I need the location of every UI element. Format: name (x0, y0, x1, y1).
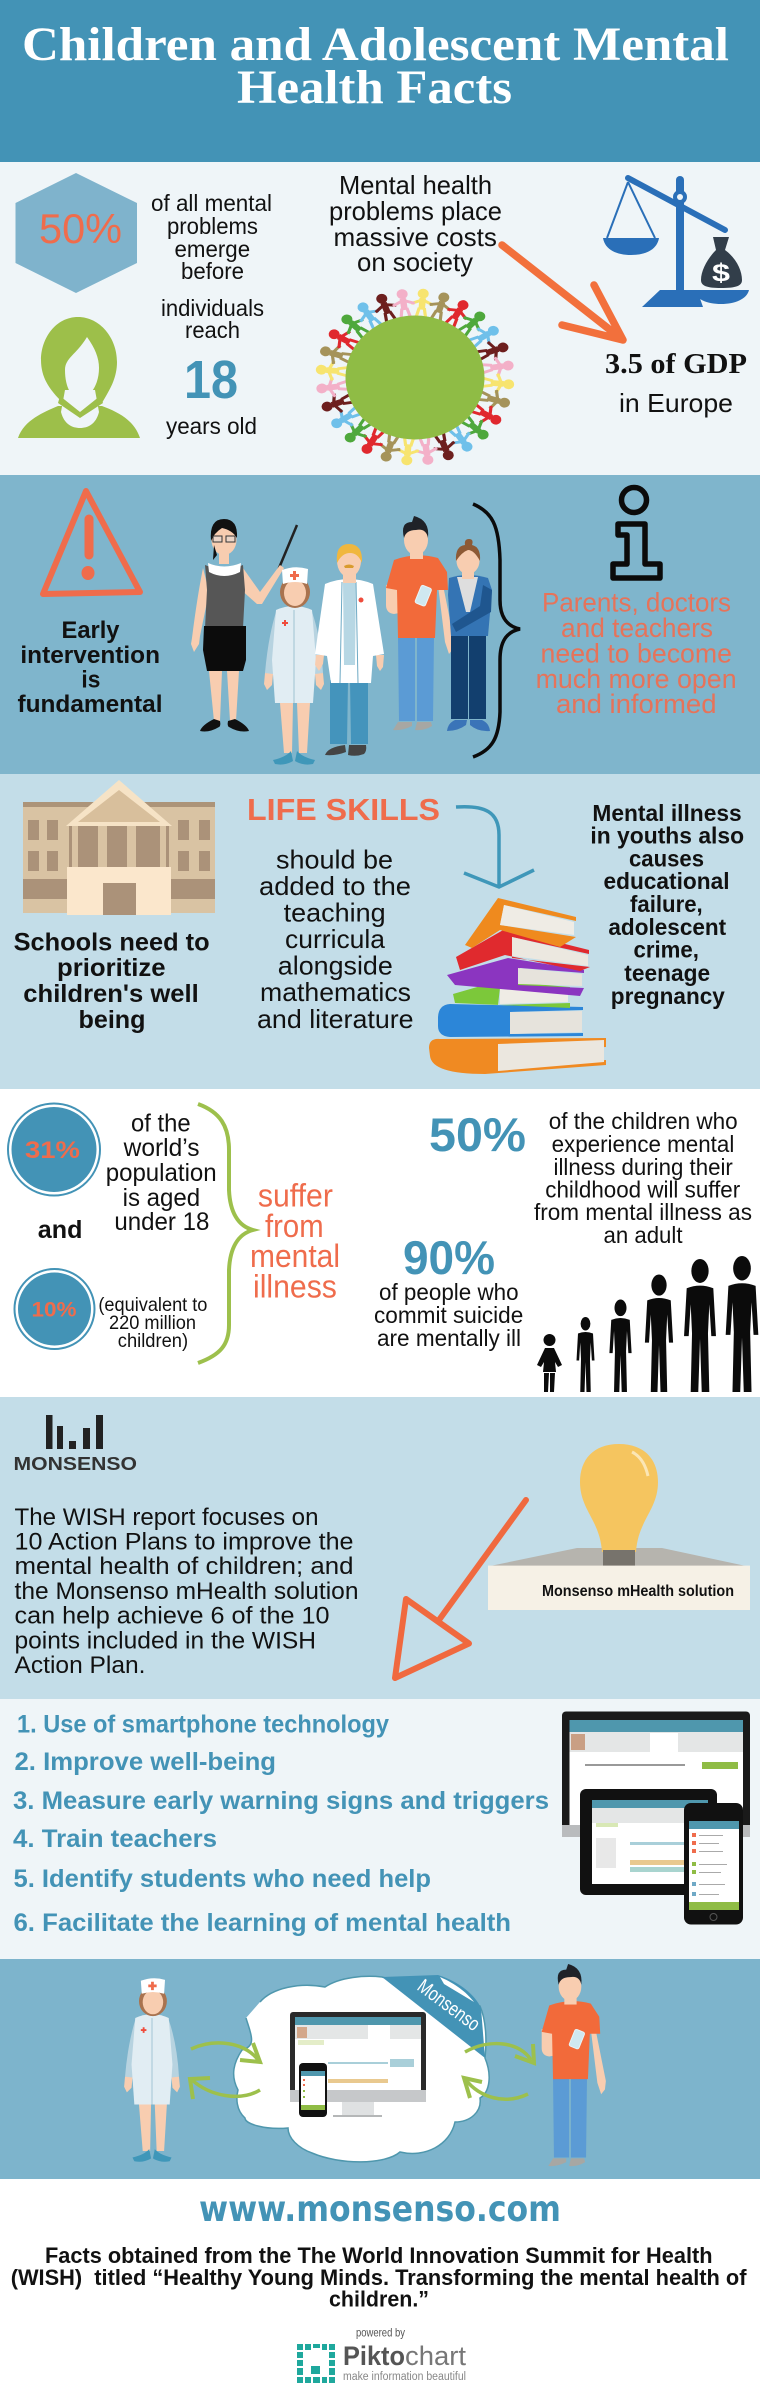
text block: WISH report: can help achieve 6 of the 10 (14, 1603, 330, 1630)
stat: 50%: of the children who (549, 1108, 738, 1134)
stat: 31% circle (8, 1104, 100, 1196)
icon: ring of people around globe (315, 288, 515, 466)
icon: cloud (234, 1976, 489, 2162)
stat: 50%: illness during their (554, 1154, 733, 1180)
illustration: man with phone (386, 516, 454, 730)
icon: monitor (290, 2012, 426, 2117)
text block: before individuals reach 18: individuals (161, 295, 264, 321)
icon: information i (613, 488, 660, 578)
stat: 50%: childhood will suffer (545, 1176, 741, 1202)
icon: phone (299, 2063, 327, 2117)
panel: six points (0, 1699, 760, 1959)
text block: parents, doctors and teachers: Parents, doctors (542, 588, 731, 618)
panel: footer (0, 2179, 760, 2393)
text block: before individuals reach 18: emerge (174, 236, 250, 262)
text block: early intervention: intervention (20, 642, 160, 669)
text block: curricula: should be (276, 845, 393, 875)
text block: massive costs: problems place (329, 196, 502, 226)
icon: ribbon (382, 1975, 485, 2058)
icon: scales with money bag (603, 178, 749, 307)
text block: early intervention (18, 617, 162, 718)
stat: 90%: commit suicide (374, 1302, 523, 1328)
text block: curricula: mathematics (260, 977, 411, 1007)
text block: 220 million: (equivalent to (98, 1294, 208, 1316)
illustration: nurse (264, 567, 324, 765)
arrow: orange down-left (395, 1500, 526, 1678)
text: powered by: powered by (356, 2326, 405, 2340)
text block: mental illness consequences: causes (629, 846, 704, 872)
text block: source: (WISH) titled “Healthy Young Minds. Transforming the mental health of (11, 2265, 747, 2290)
icon: warning triangle (43, 491, 140, 594)
panel: Monsenso intro (0, 1397, 760, 1699)
text block: massive costs: Mental health (339, 170, 492, 200)
text block: 220 million (98, 1294, 208, 1352)
text block: curricula: curricula (285, 924, 386, 954)
text block: curricula (257, 845, 414, 1034)
text block: massive costs: massive costs (334, 222, 497, 252)
arrow: to books (456, 807, 534, 887)
panel: header (0, 0, 760, 162)
text block: before individuals reach 18: 18 (184, 350, 238, 410)
text block: GDP: 3.5 of GDP (605, 349, 747, 380)
list: action points: 5. Identify students who need help (14, 1865, 431, 1893)
text block: mental illness consequences (590, 800, 744, 1009)
illustration: woman (447, 539, 492, 731)
text block: curricula: alongside (278, 950, 393, 980)
icon: ribbon: Monsenso (413, 1975, 484, 2036)
text block: before individuals reach 18: years old (166, 413, 257, 439)
text block: early intervention: is (81, 666, 100, 694)
title: Children and Adolescent Mental (22, 18, 729, 71)
text block: schools: Schools need to (14, 928, 210, 956)
stat: 90%: of people who (379, 1279, 519, 1305)
text block: mental illness consequences: educational (604, 868, 730, 894)
icon: devices (562, 1712, 750, 1924)
illustration: man with phone (542, 1964, 606, 2166)
logo: Piktochart: make information beautiful (343, 2371, 466, 2383)
text block: 220 million: children) (118, 1330, 188, 1352)
text block: schools: prioritize (57, 954, 166, 982)
icon: hexagon 50% (16, 173, 137, 293)
brace: black (473, 504, 520, 757)
stat: 90%: are mentally ill (377, 1325, 521, 1351)
text block: world's population: population (106, 1159, 217, 1187)
list: action points: 6. Facilitate the learning of mental health (14, 1909, 511, 1937)
logo: Monsenso (14, 1415, 137, 1474)
panel: Monsenso cloud (0, 1959, 760, 2179)
logo: Monsenso: MONSENSO (14, 1454, 137, 1474)
text block: before individuals reach 18 (151, 190, 272, 439)
stat: 50%: experience mental (552, 1131, 734, 1157)
icon: stack of books (429, 898, 606, 1074)
stat: 31% circle: 31% (25, 1137, 80, 1164)
text block: world's population: is aged (123, 1184, 200, 1212)
text block: massive costs: on society (357, 247, 473, 277)
text block: world's population: world’s (123, 1134, 200, 1162)
text block: world's population: of the (131, 1109, 191, 1137)
title (22, 18, 729, 114)
stat: 50%: from mental illness as (534, 1199, 752, 1225)
text block: suffer from mental illness: illness (253, 1268, 337, 1304)
text block: massive costs (329, 170, 502, 277)
text block: source: children.” (329, 2287, 429, 2312)
text block: suffer from mental illness: from (265, 1208, 324, 1244)
text block: mental illness consequences: in youths also (590, 823, 744, 849)
arrow: costs to GDP (502, 245, 623, 340)
icon: light bulb on plinth (488, 1444, 750, 1610)
stat: 50%: 50% (429, 1108, 526, 1161)
title: Health Facts (237, 61, 512, 114)
text block: mental illness consequences: crime, (634, 936, 699, 962)
text block: before individuals reach 18: before (181, 258, 244, 284)
stat: 90%: 90% (403, 1231, 495, 1284)
list: action points: 3. Measure early warning signs and triggers (13, 1787, 549, 1815)
heading: life skills: LIFE SKILLS (247, 792, 440, 827)
icon: hexagon 50%: 50% (39, 205, 122, 252)
text block: GDP (605, 349, 747, 418)
panel: life skills (0, 774, 760, 1089)
text block: mental illness consequences: failure, (630, 891, 703, 917)
illustration: nurse (124, 1978, 180, 2162)
text: website: www.monsenso.com (199, 2189, 561, 2230)
text block: before individuals reach 18: of all mental (151, 190, 272, 216)
text block: schools: children's well (23, 980, 199, 1008)
icon: scales with money bag: $ (712, 259, 730, 287)
text block: source (11, 2243, 747, 2312)
icon: woman (18, 317, 140, 438)
icon: light bulb on plinth: Monsenso mHealth solution (542, 1583, 734, 1600)
text block: curricula: added to the (259, 871, 411, 901)
text block: WISH report: Action Plan. (14, 1652, 146, 1679)
text block: before individuals reach 18: reach (185, 317, 240, 343)
logo: Piktochart: Pikto (343, 2341, 405, 2371)
icon: growing silhouettes (537, 1256, 758, 1392)
text block: WISH report: mental health of children; and (14, 1553, 353, 1580)
text block: mental illness consequences: teenage (624, 960, 710, 986)
text block: 220 million: 220 million (109, 1312, 196, 1334)
text block: GDP: in Europe (619, 388, 733, 418)
text block: mental illness consequences: adolescent (608, 914, 727, 940)
text block: early intervention: fundamental (18, 691, 162, 718)
brace: green (198, 1104, 253, 1363)
list: action points: 2. Improve well-being (14, 1748, 276, 1776)
text block: early intervention: Early (62, 617, 120, 644)
illustration: doctor (315, 544, 384, 756)
logo: Piktochart (297, 2341, 467, 2383)
text block: mental illness consequences: pregnancy (611, 983, 725, 1009)
stat: 10% circle: 10% (32, 1298, 77, 1322)
panel: society costs (0, 162, 760, 475)
text block: WISH report: 10 Action Plans to improve the (14, 1528, 354, 1555)
panel: early intervention (0, 475, 760, 774)
text block: parents, doctors and teachers (536, 588, 737, 719)
stat: 10% circle (14, 1269, 94, 1349)
text block: parents, doctors and teachers: and teachers (561, 613, 713, 643)
list: action points: 1. Use of smartphone technology (17, 1711, 389, 1739)
text block: world's population (106, 1109, 217, 1236)
logo: Piktochart: chart (405, 2341, 467, 2371)
text block: suffer from mental illness: suffer (258, 1178, 333, 1214)
panel: statistics (0, 1089, 760, 1397)
text block: schools (14, 928, 210, 1034)
text block: parents, doctors and teachers: need to become (540, 639, 732, 669)
text block: suffer from mental illness (250, 1178, 340, 1304)
text block: suffer from mental illness: mental (250, 1238, 340, 1274)
text block: world's population: under 18 (114, 1208, 209, 1236)
text block: WISH report: points included in the WISH (14, 1628, 316, 1655)
stat: 50% (429, 1108, 752, 1248)
text block: parents, doctors and teachers: much more open (536, 664, 737, 694)
stat: 50%: an adult (604, 1222, 683, 1248)
text block: source: Facts obtained from the The World Innovation Summit for Health (45, 2243, 712, 2268)
text block: curricula: teaching (284, 898, 386, 928)
illustration: teacher (191, 519, 297, 732)
icon: school building (23, 780, 215, 915)
text block: mental illness consequences: Mental illness (592, 800, 742, 826)
text: and: and (38, 1216, 82, 1244)
list: action points (13, 1711, 549, 1937)
text block: before individuals reach 18: problems (167, 213, 258, 239)
text block: schools: being (78, 1006, 146, 1034)
text block: WISH report (14, 1504, 358, 1679)
stat: 90% (374, 1231, 523, 1351)
text block: WISH report: The WISH report focuses on (14, 1504, 318, 1531)
text block: curricula: and literature (257, 1004, 414, 1034)
list: action points: 4. Train teachers (13, 1825, 217, 1853)
text block: WISH report: the Monsenso mHealth solution (14, 1578, 358, 1605)
text block: parents, doctors and teachers: and informed (556, 689, 716, 719)
arrows: data flow (190, 2043, 534, 2099)
